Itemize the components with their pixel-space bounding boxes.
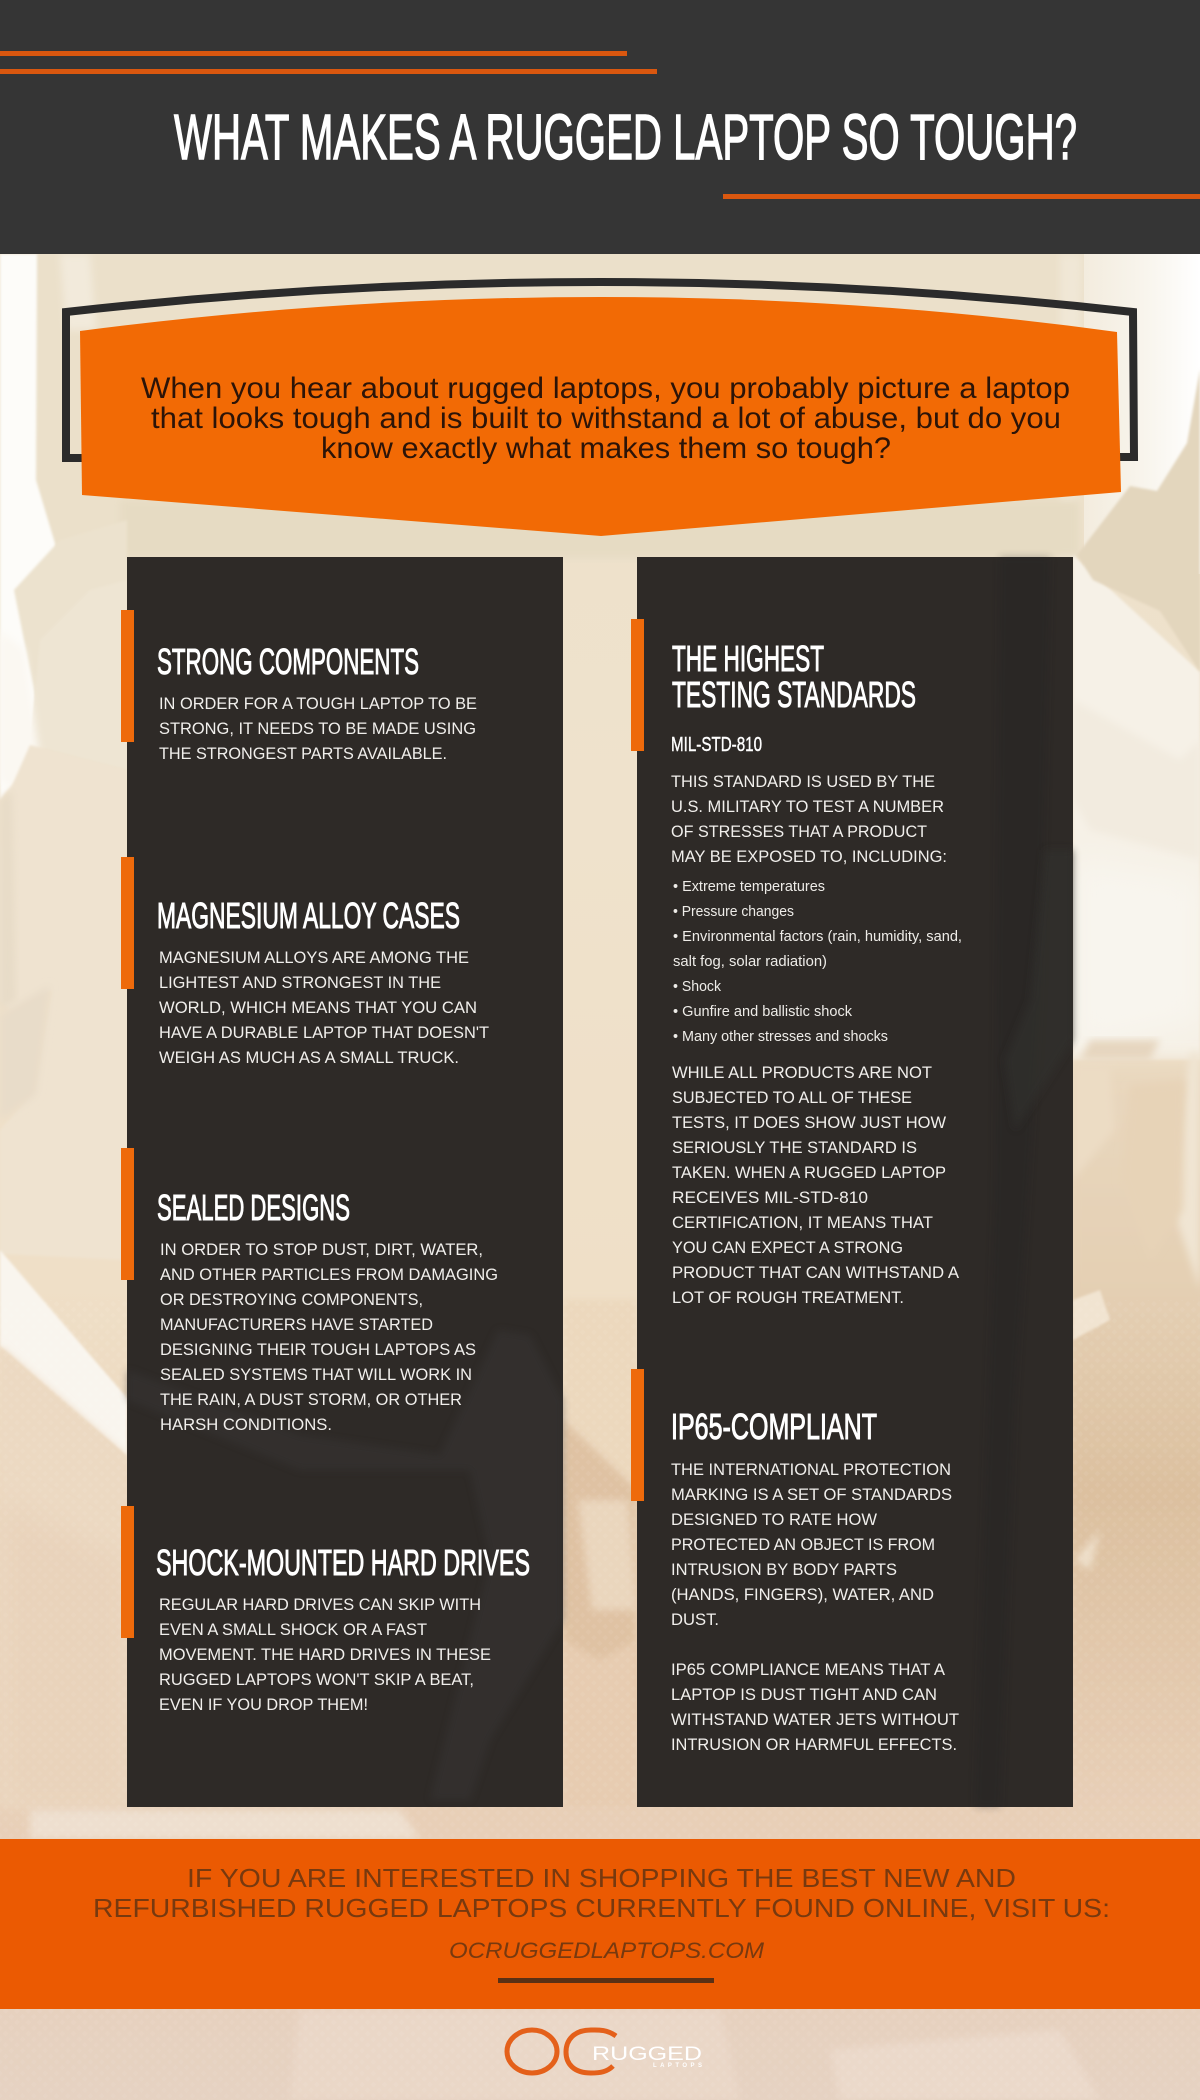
left sleeve and cuff — [14, 520, 127, 770]
section: highest testing standards: TESTING STANDARDS — [672, 674, 916, 715]
section: magnesium alloy cases: MAGNESIUM ALLOY CASES — [157, 895, 460, 936]
bullet list of stresses: salt fog, solar radiation) — [673, 954, 827, 970]
upper right light — [1084, 254, 1200, 574]
section: highest testing standards: PRODUCT THAT CAN WITHSTAND A — [672, 1264, 959, 1282]
section: highest testing standards — [631, 619, 962, 1307]
upper left white — [0, 254, 60, 800]
call to action text: IF YOU ARE INTERESTED IN SHOPPING THE BEST NEW AND — [187, 1863, 1016, 1893]
section: strong components: THE STRONGEST PARTS AVAILABLE. — [159, 745, 447, 763]
section: IP65-compliant: IP65-COMPLIANT — [671, 1406, 877, 1447]
section: sealed designs: MANUFACTURERS HAVE STARTED — [160, 1316, 433, 1334]
intro text — [141, 372, 1070, 465]
section: highest testing standards: THIS STANDARD IS USED BY THE — [671, 773, 935, 791]
right sleeve — [1077, 369, 1200, 672]
section: highest testing standards: LOT OF ROUGH TREATMENT. — [672, 1289, 904, 1307]
section: highest testing standards: TESTS, IT DOES SHOW JUST HOW — [672, 1114, 946, 1132]
section: shock-mounted hard drives: MOVEMENT. THE HARD DRIVES IN THESE — [159, 1646, 491, 1664]
section: highest testing standards: RECEIVES MIL-STD-810 — [672, 1189, 868, 1207]
bullet list of stresses: • Environmental factors (rain, humidity, sand, — [673, 929, 962, 945]
section: IP65-compliant: WITHSTAND WATER JETS WITHOUT — [671, 1711, 959, 1729]
section: strong components — [121, 610, 477, 763]
section: shock-mounted hard drives: EVEN A SMALL SHOCK OR A FAST — [159, 1621, 427, 1639]
section: shock-mounted hard drives: SHOCK-MOUNTED HARD DRIVES — [156, 1542, 530, 1583]
section: shock-mounted hard drives — [121, 1506, 530, 1714]
section: strong components: STRONG COMPONENTS — [157, 641, 419, 682]
section: shock-mounted hard drives: REGULAR HARD DRIVES CAN SKIP WITH — [159, 1596, 481, 1614]
call to action band — [0, 1839, 1200, 2009]
section: highest testing standards: WHILE ALL PRODUCTS ARE NOT — [672, 1064, 932, 1082]
gutter tones — [563, 1300, 637, 1490]
section: IP65-compliant: LAPTOP IS DUST TIGHT AND CAN — [671, 1686, 937, 1704]
section: sealed designs — [121, 1148, 498, 1434]
bullet list of stresses: • Shock — [673, 979, 722, 995]
logo: OC Rugged Laptops — [507, 2030, 702, 2073]
section: IP65-compliant: MARKING IS A SET OF STANDARDS — [671, 1486, 952, 1504]
section: highest testing standards: CERTIFICATION, IT MEANS THAT — [672, 1214, 933, 1232]
section: magnesium alloy cases: WORLD, WHICH MEANS THAT YOU CAN — [159, 999, 477, 1017]
section: strong components: STRONG, IT NEEDS TO BE MADE USING — [159, 720, 476, 738]
section: highest testing standards: TAKEN. WHEN A RUGGED LAPTOP — [672, 1164, 946, 1182]
section: IP65-compliant: THE INTERNATIONAL PROTECTION — [671, 1461, 951, 1479]
bullet list of stresses: • Gunfire and ballistic shock — [673, 1004, 853, 1020]
section: sealed designs: SEALED SYSTEMS THAT WILL WORK IN — [160, 1366, 472, 1384]
section: magnesium alloy cases: LIGHTEST AND STRONGEST IN THE — [159, 974, 441, 992]
bullet list of stresses: • Extreme temperatures — [673, 879, 825, 895]
section: shock-mounted hard drives: EVEN IF YOU DROP THEM! — [159, 1696, 368, 1714]
website url: OCRUGGEDLAPTOPS.COM — [449, 1938, 765, 1963]
section: sealed designs: THE RAIN, A DUST STORM, OR OTHER — [160, 1391, 462, 1409]
section: sealed designs: OR DESTROYING COMPONENTS, — [160, 1291, 423, 1309]
panel: left column — [121, 557, 563, 1807]
section: IP65-compliant: INTRUSION BY BODY PARTS — [671, 1561, 897, 1579]
right hand area — [1073, 555, 1200, 1060]
section: IP65-compliant: IP65 COMPLIANCE MEANS THAT A — [671, 1661, 945, 1679]
section: magnesium alloy cases: MAGNESIUM ALLOYS ARE AMONG THE — [159, 949, 469, 967]
intro text: know exactly what makes them so tough? — [321, 432, 891, 465]
section: highest testing standards: U.S. MILITARY TO TEST A NUMBER — [671, 798, 944, 816]
bottom fabric tones — [30, 1810, 420, 1839]
section: IP65-compliant — [631, 1369, 959, 1754]
section: shock-mounted hard drives: RUGGED LAPTOPS WON'T SKIP A BEAT, — [159, 1671, 474, 1689]
section: highest testing standards: YOU CAN EXPECT A STRONG — [672, 1239, 903, 1257]
bullet list of stresses: • Pressure changes — [673, 904, 794, 920]
section: magnesium alloy cases: WEIGH AS MUCH AS A SMALL TRUCK. — [159, 1049, 459, 1067]
banner outline frame — [66, 282, 1134, 458]
section: highest testing standards: SUBJECTED TO ALL OF THESE — [672, 1089, 912, 1107]
section: sealed designs: SEALED DESIGNS — [157, 1187, 350, 1228]
section: IP65-compliant: (HANDS, FINGERS), WATER, AND — [671, 1586, 934, 1604]
bullet list of stresses — [673, 879, 962, 1045]
section: sealed designs: AND OTHER PARTICLES FROM DAMAGING — [160, 1266, 498, 1284]
right lower holster and straps — [1060, 1062, 1200, 1842]
panel: right column — [631, 557, 1073, 1807]
banner orange shape — [80, 297, 1121, 536]
section: magnesium alloy cases — [121, 857, 489, 1067]
section: sealed designs: HARSH CONDITIONS. — [160, 1416, 332, 1434]
section: highest testing standards: SERIOUSLY THE STANDARD IS — [672, 1139, 917, 1157]
bullet list of stresses: • Many other stresses and shocks — [673, 1029, 888, 1045]
section: highest testing standards: THE HIGHEST — [672, 638, 824, 679]
section: IP65-compliant: INTRUSION OR HARMFUL EFFECTS. — [671, 1736, 957, 1754]
section: highest testing standards: OF STRESSES THAT A PRODUCT — [671, 823, 927, 841]
intro text: that looks tough and is built to withstand a lot of abuse, but do you — [151, 402, 1061, 435]
call to action band: REFURBISHED RUGGED LAPTOPS CURRENTLY FOUND ONLINE, VISIT US: — [93, 1893, 1110, 1923]
url underline — [498, 1978, 714, 1983]
intro text: When you hear about rugged laptops, you probably picture a laptop — [141, 372, 1070, 405]
section: sealed designs: DESIGNING THEIR TOUGH LAPTOPS AS — [160, 1341, 476, 1359]
section: IP65-compliant: PROTECTED AN OBJECT IS FROM — [671, 1536, 935, 1554]
subheading: MIL-STD-810: MIL-STD-810 — [671, 734, 762, 756]
strap — [0, 1250, 127, 1456]
section: IP65-compliant: DESIGNED TO RATE HOW — [671, 1511, 877, 1529]
section: magnesium alloy cases: HAVE A DURABLE LAPTOP THAT DOESN'T — [159, 1024, 489, 1042]
section: highest testing standards: MAY BE EXPOSED TO, INCLUDING: — [671, 848, 947, 866]
section: IP65-compliant: DUST. — [671, 1611, 719, 1629]
logo: OC Rugged Laptops: RUGGED — [592, 2044, 702, 2065]
header bar — [0, 0, 1200, 254]
section: strong components: IN ORDER FOR A TOUGH LAPTOP TO BE — [159, 695, 477, 713]
section: sealed designs: IN ORDER TO STOP DUST, DIRT, WATER, — [160, 1241, 483, 1259]
logo: OC Rugged Laptops: LAPTOPS — [653, 2063, 702, 2069]
intro banner — [66, 282, 1134, 536]
